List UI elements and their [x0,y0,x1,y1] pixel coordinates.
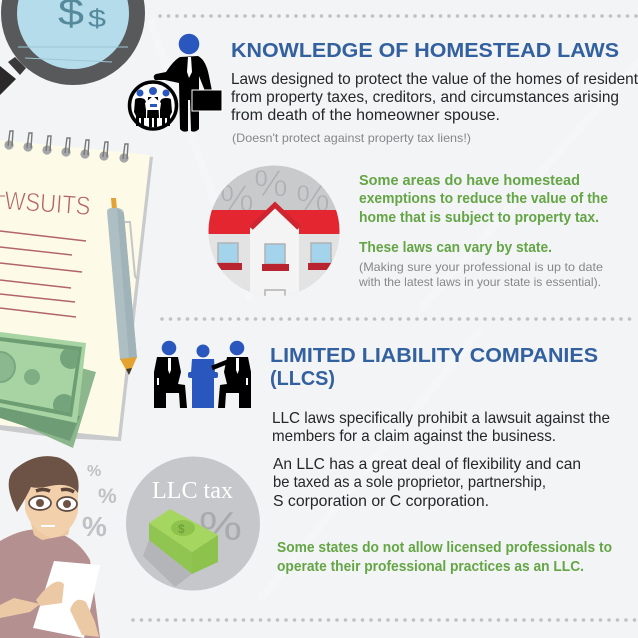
heading: limited liability companies: LIMITED LIABILITY COMPANIES [270,345,598,367]
heading: limited liability companies [270,345,598,390]
heading: knowledge of homestead laws: KNOWLEDGE OF HOMESTEAD LAWS [231,40,619,62]
text block: LLC laws: LLC laws specifically prohibit a lawsuit against the [272,410,610,427]
percent signs: % [82,511,107,542]
percent signs: % [87,463,101,480]
green callout: homestead exemptions: home that is subject to property tax. [359,210,599,226]
note: professional up to date: (Making sure your professional is up to date [359,260,603,274]
green money bundle: $ [178,522,185,536]
notebook with lawsuits list [0,131,153,441]
percent signs [82,463,117,542]
note: professional up to date: with the latest laws in your state is essential). [358,275,601,289]
note: property tax liens: (Doesn't protect against property tax liens!) [232,131,471,145]
text block: homestead laws description: from death of the homeowner spouse. [231,107,500,124]
house illustration in circle: % [254,163,288,205]
green callout: homestead exemptions: exemptions to reduce the value of the [359,191,608,207]
text block: LLC laws: members for a claim against the business. [272,428,556,445]
notebook spiral rings [4,131,129,163]
magnifying glass with dollar signs [0,0,137,95]
icon: clients circle [130,82,176,129]
handwritten notebook title: WSUITS [4,185,91,221]
green callout: homestead exemptions [359,173,608,256]
house illustration in circle [208,166,340,296]
icon: businessman with clients [130,34,222,132]
text block: LLC flexibility: be taxed as a sole proprietor, partnership, [273,474,546,491]
LLC tax circle with money [126,456,260,590]
text block: homestead laws description: from property taxes, creditors, and circumstances arising [231,89,619,106]
text block: homestead laws description [231,71,638,124]
house illustration in circle: % [296,178,330,220]
pen [107,198,139,375]
green callout: licensed professionals: Some states do not allow licensed professionals to [277,540,612,556]
percent signs: % [98,485,117,508]
house illustration in circle: % [220,178,254,220]
document in hand [33,561,100,638]
green callout: licensed professionals: operate their professional practices as an LLC. [277,559,584,575]
note: professional up to date [358,260,603,289]
person reading a document [0,456,117,638]
stack of dollar bills [0,332,96,448]
magnifying glass with dollar signs: $ [88,5,106,33]
text block: LLC flexibility: An LLC has a great deal of flexibility and can [273,456,581,473]
LLC tax label: LLC tax [152,478,233,504]
text block: LLC laws [272,410,610,445]
green callout: licensed professionals [277,540,612,575]
icon: meeting of three people [154,341,251,408]
heading: limited liability companies: (LLCS) [270,368,335,390]
green callout: homestead exemptions: These laws can vary by state. [359,240,552,256]
text block: LLC flexibility [273,456,581,510]
green callout: homestead exemptions: Some areas do have homestead [359,173,580,189]
text block: LLC flexibility: S corporation or C corporation. [273,493,489,510]
LLC tax circle with money: % [199,505,242,549]
